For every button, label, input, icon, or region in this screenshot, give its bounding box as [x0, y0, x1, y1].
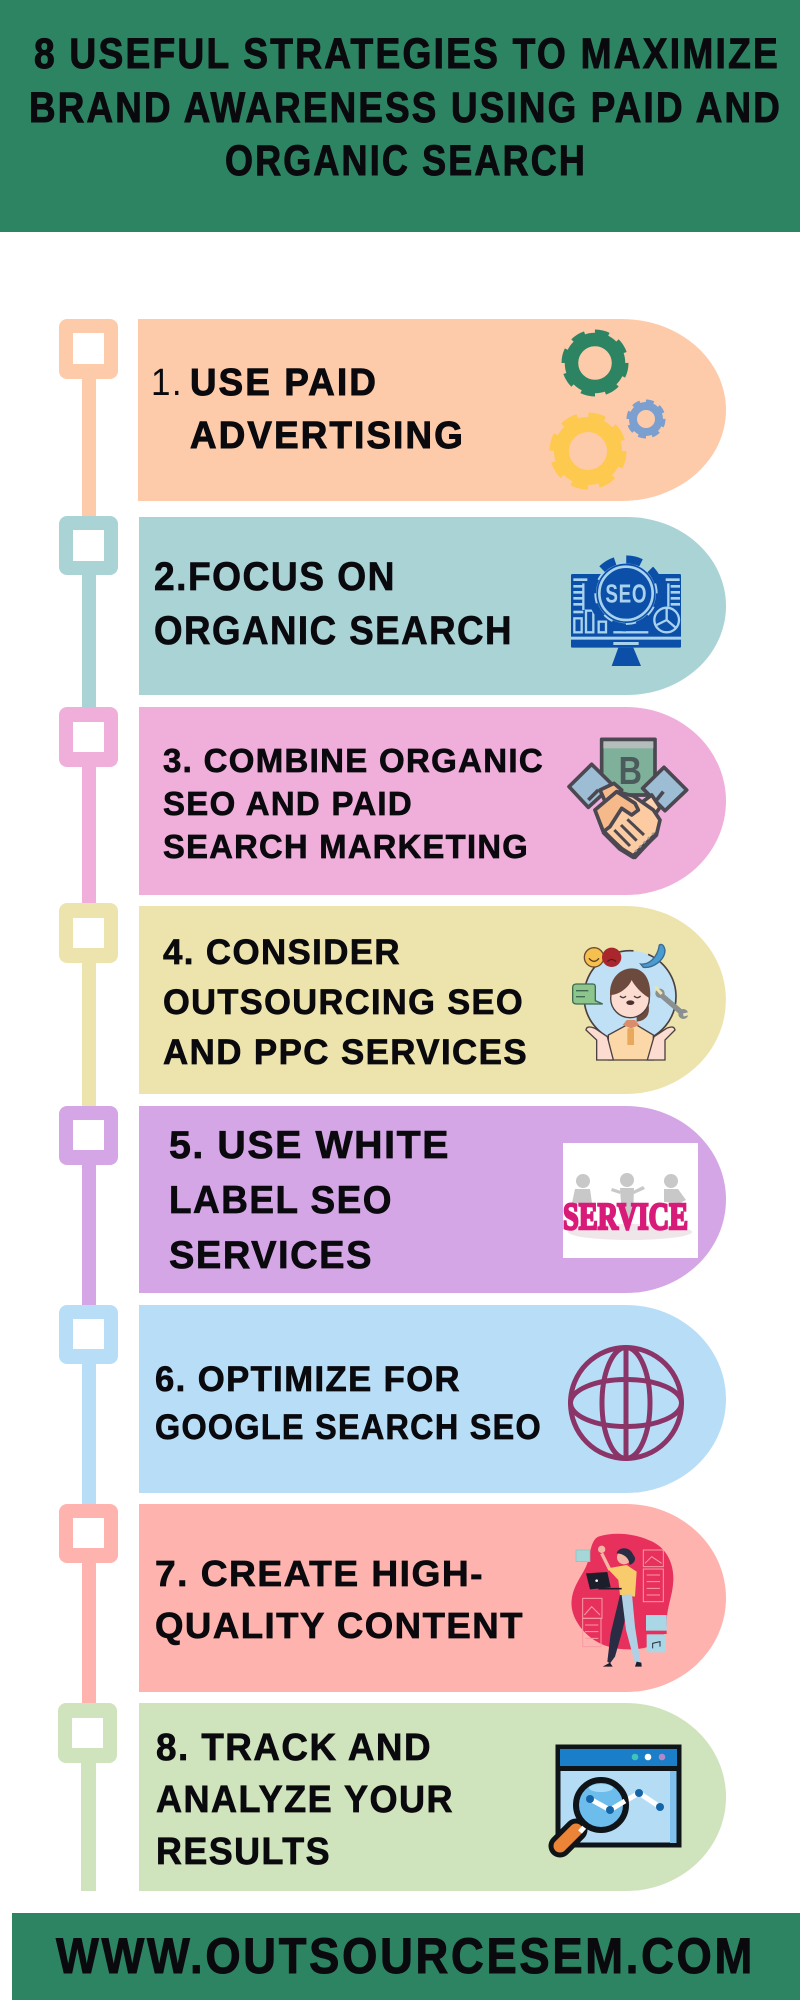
icon: handshake and book [569, 739, 687, 857]
header band with title [0, 0, 800, 232]
timeline node 6 [59, 1305, 118, 1506]
timeline node 5 [59, 1106, 118, 1307]
step 4 text: 4. CONSIDER [163, 933, 401, 972]
title: ORGANIC SEARCH [225, 137, 587, 185]
step 4 text: AND PPC SERVICES [163, 1033, 528, 1072]
step 8 text: 8. TRACK AND [156, 1727, 432, 1769]
icon: service photo: SERVICE [563, 1196, 688, 1238]
panel 6: optimize for google search SEO [139, 1305, 726, 1493]
icon: SEO monitor: SEO [605, 579, 647, 609]
footer band with website [12, 1913, 800, 2000]
step 5 text [169, 1124, 450, 1277]
timeline node 7 [59, 1504, 118, 1705]
step 5 text: LABEL SEO [169, 1179, 393, 1222]
timeline node 3 [59, 707, 118, 906]
step 4 text: OUTSOURCING SEO [163, 983, 524, 1022]
icon: analytics window with magnifier [558, 1747, 679, 1846]
step 7 text: QUALITY CONTENT [155, 1605, 524, 1646]
step 2 text: ORGANIC SEARCH [154, 609, 513, 653]
step 5 text: 5. USE WHITE [169, 1124, 450, 1167]
step 2 text: 2.FOCUS ON [154, 555, 396, 599]
step 8 text [156, 1727, 454, 1873]
timeline node 4 [59, 903, 118, 1108]
icon: SEO monitor [571, 559, 681, 666]
panel 7: create high-quality content [139, 1504, 726, 1692]
step 5 text: SERVICES [169, 1234, 373, 1277]
panel 5: use white label SEO services [139, 1106, 726, 1293]
title [29, 30, 782, 185]
step 7 text: 7. CREATE HIGH- [155, 1553, 484, 1594]
step 6 text: 6. OPTIMIZE FOR [155, 1360, 461, 1399]
panel 8: track and analyze your results [139, 1703, 726, 1891]
step 1 text: 1. [151, 362, 183, 404]
panel 2: focus on organic search [139, 517, 726, 695]
step 3 text: 3. COMBINE ORGANIC [163, 742, 544, 779]
step 1 text [151, 362, 465, 457]
step 8 text: ANALYZE YOUR [156, 1779, 454, 1821]
timeline node 2 [59, 516, 118, 710]
icon: customer service woman [573, 944, 690, 1060]
icon: woman with laptop [571, 1534, 673, 1667]
step 6 text [155, 1360, 542, 1447]
step 1 text: USE PAID [190, 362, 378, 404]
step 6 text: GOOGLE SEARCH SEO [155, 1408, 542, 1447]
icon: service photo [563, 1143, 698, 1258]
step 3 text [163, 742, 544, 865]
icon: gears [552, 332, 664, 487]
icon: handshake and book: B [619, 749, 642, 793]
panel 4: consider outsourcing SEO and PPC services [139, 906, 726, 1094]
step 4 text [163, 933, 528, 1072]
step 7 text [155, 1553, 524, 1646]
panel 1: use paid advertising [138, 319, 726, 501]
timeline node 8 [58, 1703, 117, 1891]
icon: globe [570, 1347, 682, 1459]
panel 3: combine organic SEO and paid search marketing [139, 707, 726, 895]
step 2 text [154, 555, 513, 653]
step 8 text: RESULTS [156, 1831, 331, 1873]
timeline node 1 [59, 319, 118, 520]
step 1 text: ADVERTISING [190, 415, 465, 457]
step 3 text: SEO AND PAID [163, 785, 413, 822]
step 3 text: SEARCH MARKETING [163, 828, 529, 865]
